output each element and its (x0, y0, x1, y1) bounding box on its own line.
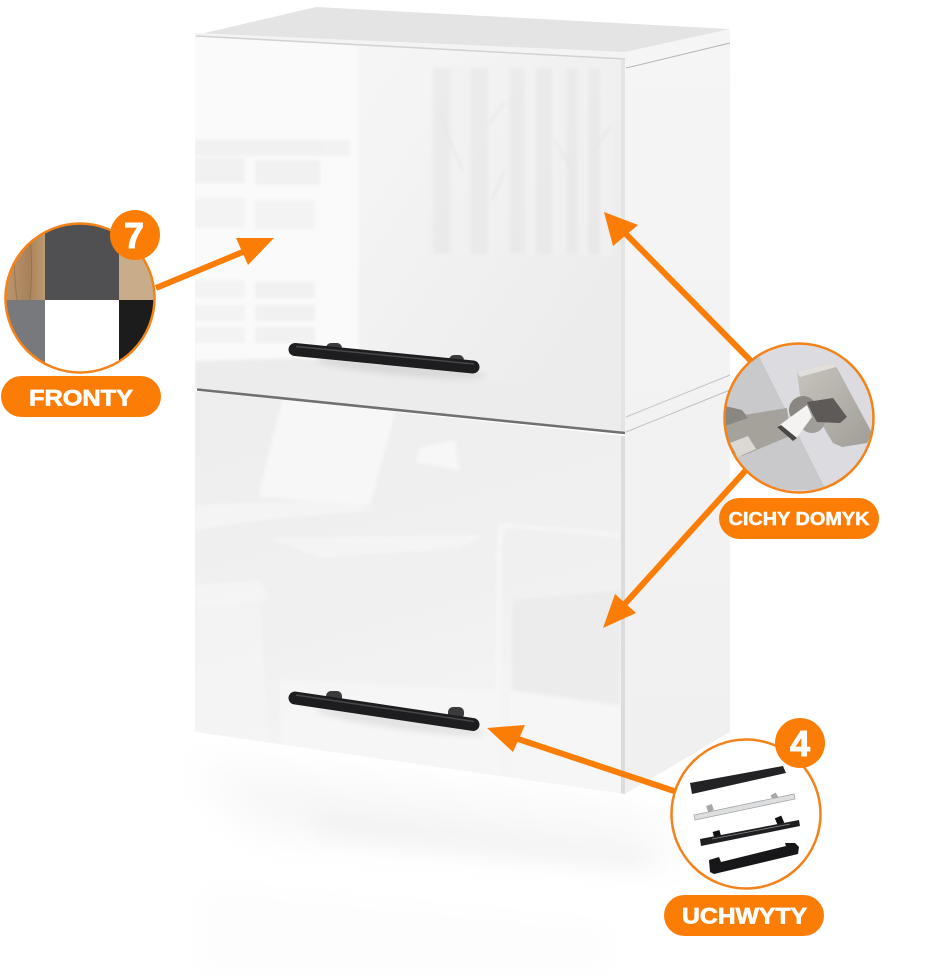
arrow: handles to lower handle (487, 725, 680, 793)
callout: cichy domyk (719, 343, 879, 539)
handle option: black round (700, 817, 800, 846)
gap between doors (197, 390, 625, 433)
top front edge (195, 33, 627, 62)
badge: 7: 7 (124, 215, 144, 256)
door right edge (621, 436, 625, 794)
colour swatches circle (5, 222, 156, 375)
reflected window (198, 322, 356, 388)
lower door (195, 381, 625, 794)
hinge photo circle (724, 343, 874, 493)
arrow: hinge to lower door (603, 470, 746, 628)
arrow: hinge to upper door (604, 212, 752, 362)
floor shadow and reflection (190, 765, 700, 976)
cabinet top surface (196, 7, 730, 53)
reflected birch picture (434, 72, 450, 145)
arrow: fronty to upper door (156, 238, 274, 288)
door right edge (621, 60, 625, 433)
label: CICHY DOMYK (719, 498, 879, 539)
label: UCHWYTY: UCHWYTY (682, 904, 807, 928)
wall cabinet (195, 7, 730, 794)
handle: upper door (295, 343, 485, 383)
reflected pillow (263, 400, 393, 498)
hinge arm (725, 408, 790, 456)
hinge cup plate (797, 363, 872, 447)
cabinet side panel (625, 29, 730, 794)
handles circle (672, 740, 820, 888)
handle option: black arched (709, 843, 799, 874)
upper door (195, 30, 625, 433)
badge: 4: 4 (790, 723, 810, 764)
label: FRONTY (1, 376, 161, 417)
label: UCHWYTY (664, 895, 824, 936)
reflected sofa and table (195, 500, 625, 794)
label: CICHY DOMYK: CICHY DOMYK (728, 508, 870, 529)
badge: 4 (775, 718, 825, 768)
handle option: silver (694, 794, 795, 820)
handle: lower door (295, 691, 485, 741)
badge: 7 (110, 210, 160, 260)
label: FRONTY: FRONTY (29, 386, 133, 410)
callout: fronty (1, 210, 161, 417)
reflected chair frame and pattern (560, 678, 617, 702)
handle option: black bar (690, 766, 786, 794)
callout: uchwyty (664, 718, 825, 936)
